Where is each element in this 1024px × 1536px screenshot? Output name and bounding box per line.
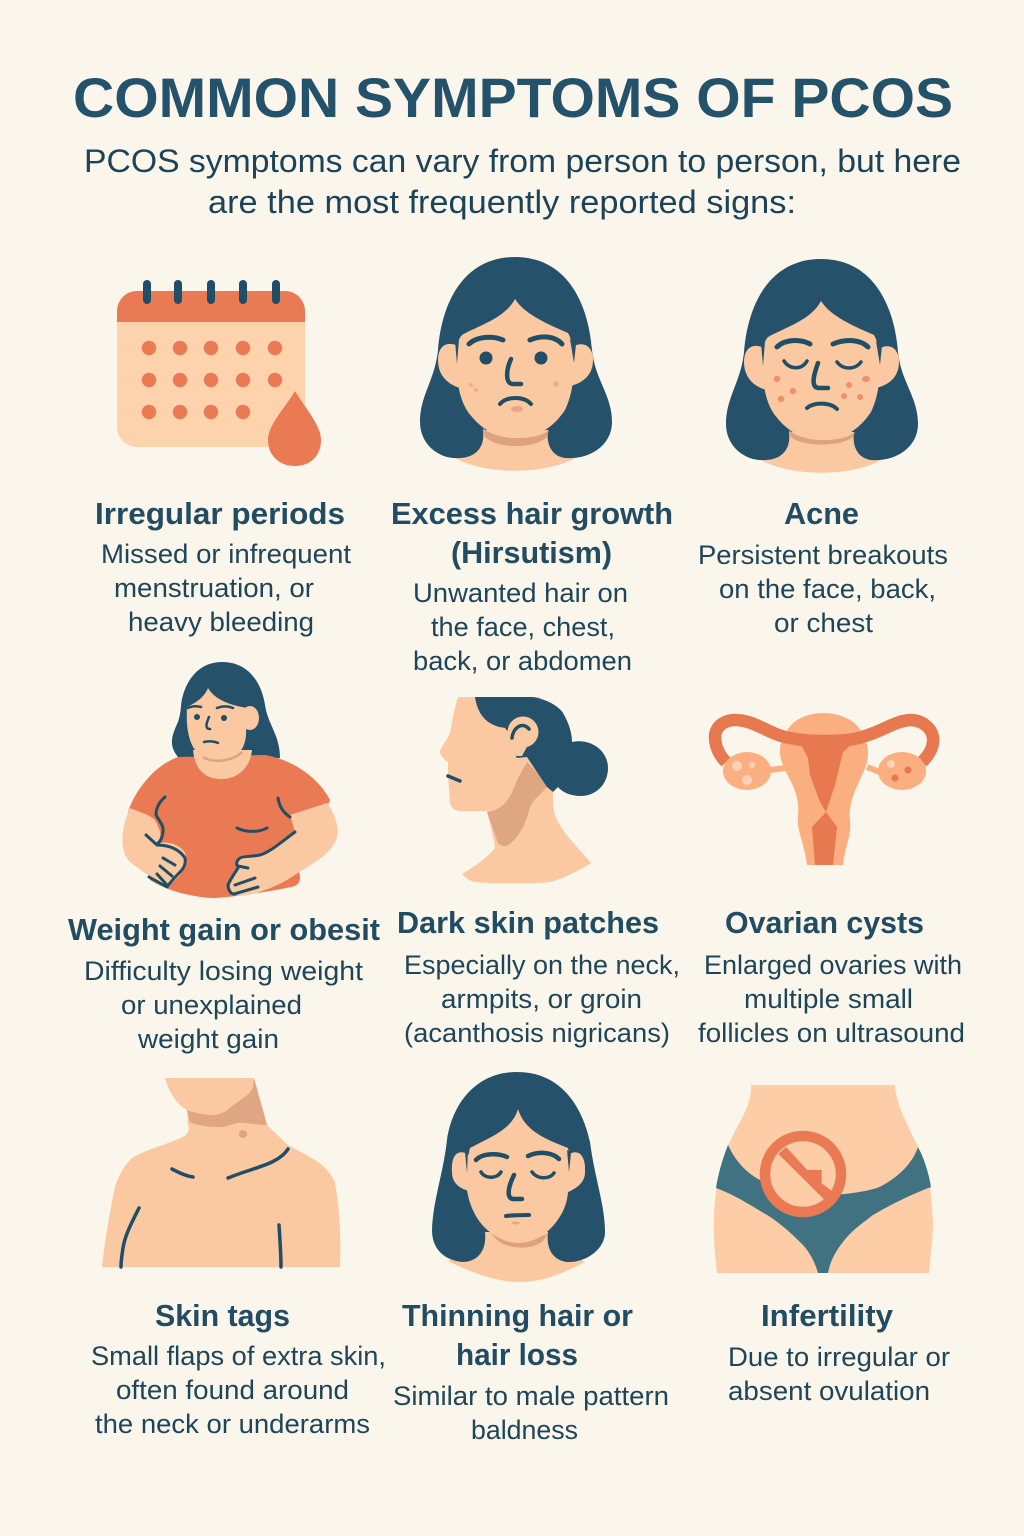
heading and text: excess hair growth: Unwanted hair on — [413, 578, 628, 608]
heading and text: excess hair growth: the face, chest, — [431, 612, 615, 642]
icon: side profile with dark neck patch — [440, 697, 608, 884]
heading and text: thinning hair: Similar to male pattern — [393, 1381, 669, 1411]
heading and text: ovarian cysts: follicles on ultrasound — [698, 1018, 965, 1048]
icon: face with acne — [726, 259, 918, 473]
heading and text: acne: or chest — [774, 608, 874, 638]
heading and text: skin tags: Small flaps of extra skin, — [91, 1341, 386, 1371]
icon: neck and shoulders with skin tag — [102, 1078, 340, 1267]
heading and text: excess hair growth: Excess hair growth — [391, 496, 673, 531]
heading and text: infertility: Due to irregular or — [728, 1342, 950, 1372]
icon: woman holding belly (weight gain) — [122, 662, 338, 898]
heading and text: skin tags: often found around — [116, 1375, 349, 1405]
intro text: PCOS symptoms can vary from person to person, but here — [84, 143, 961, 179]
heading and text: acne: Persistent breakouts — [698, 540, 948, 570]
heading and text: thinning hair — [393, 1298, 669, 1445]
icon: calendar with blood drop — [117, 280, 321, 466]
icon: uterus and ovaries — [715, 713, 933, 865]
heading and text: thinning hair: hair loss — [456, 1337, 578, 1372]
heading and text: skin tags: Skin tags — [155, 1298, 290, 1333]
heading and text: acne: on the face, back, — [719, 574, 936, 604]
heading and text: weight gain: Difficulty losing weight — [84, 956, 364, 986]
heading and text: weight gain: Weight gain or obesit — [68, 912, 380, 947]
heading and text: ovarian cysts: multiple small — [744, 984, 913, 1014]
heading and text: irregular periods: heavy bleeding — [128, 607, 314, 637]
icon: face with thinning hair — [432, 1072, 605, 1282]
heading and text: thinning hair: baldness — [471, 1415, 578, 1445]
heading and text: ovarian cysts — [698, 905, 965, 1048]
title: COMMON SYMPTOMS OF PCOS — [73, 66, 953, 129]
intro text — [84, 143, 961, 220]
heading and text: excess hair growth: (Hirsutism) — [451, 535, 612, 570]
heading and text: weight gain — [68, 912, 380, 1054]
heading and text: thinning hair: Thinning hair or — [402, 1298, 633, 1333]
heading and text: irregular periods — [95, 496, 352, 637]
heading and text: dark skin patches: Dark skin patches — [397, 905, 659, 940]
heading and text: infertility: Infertility — [761, 1298, 894, 1333]
heading and text: weight gain: or unexplained — [121, 990, 302, 1020]
icon: pelvis with prohibition sign (infertility) — [714, 1085, 933, 1273]
heading and text: dark skin patches — [397, 905, 680, 1048]
heading and text: irregular periods: menstruation, or — [114, 573, 314, 603]
heading and text: dark skin patches: (acanthosis nigricans) — [404, 1018, 670, 1048]
heading and text: excess hair growth: back, or abdomen — [413, 646, 632, 676]
heading and text: irregular periods: Missed or infrequent — [101, 539, 352, 569]
heading and text: infertility — [728, 1298, 950, 1406]
heading and text: dark skin patches: armpits, or groin — [441, 984, 642, 1014]
icon: face with excess hair growth — [420, 257, 612, 471]
heading and text: ovarian cysts: Ovarian cysts — [725, 905, 924, 940]
heading and text: excess hair growth — [391, 496, 673, 676]
heading and text: acne: Acne — [784, 496, 859, 531]
heading and text: ovarian cysts: Enlarged ovaries with — [704, 950, 962, 980]
heading and text: weight gain: weight gain — [137, 1024, 279, 1054]
heading and text: skin tags — [91, 1298, 386, 1439]
heading and text: dark skin patches: Especially on the neck, — [404, 950, 680, 980]
heading and text: skin tags: the neck or underarms — [95, 1409, 370, 1439]
heading and text: acne — [698, 496, 948, 638]
intro text: are the most frequently reported signs: — [208, 184, 796, 220]
heading and text: irregular periods: Irregular periods — [95, 496, 345, 531]
heading and text: infertility: absent ovulation — [728, 1376, 930, 1406]
